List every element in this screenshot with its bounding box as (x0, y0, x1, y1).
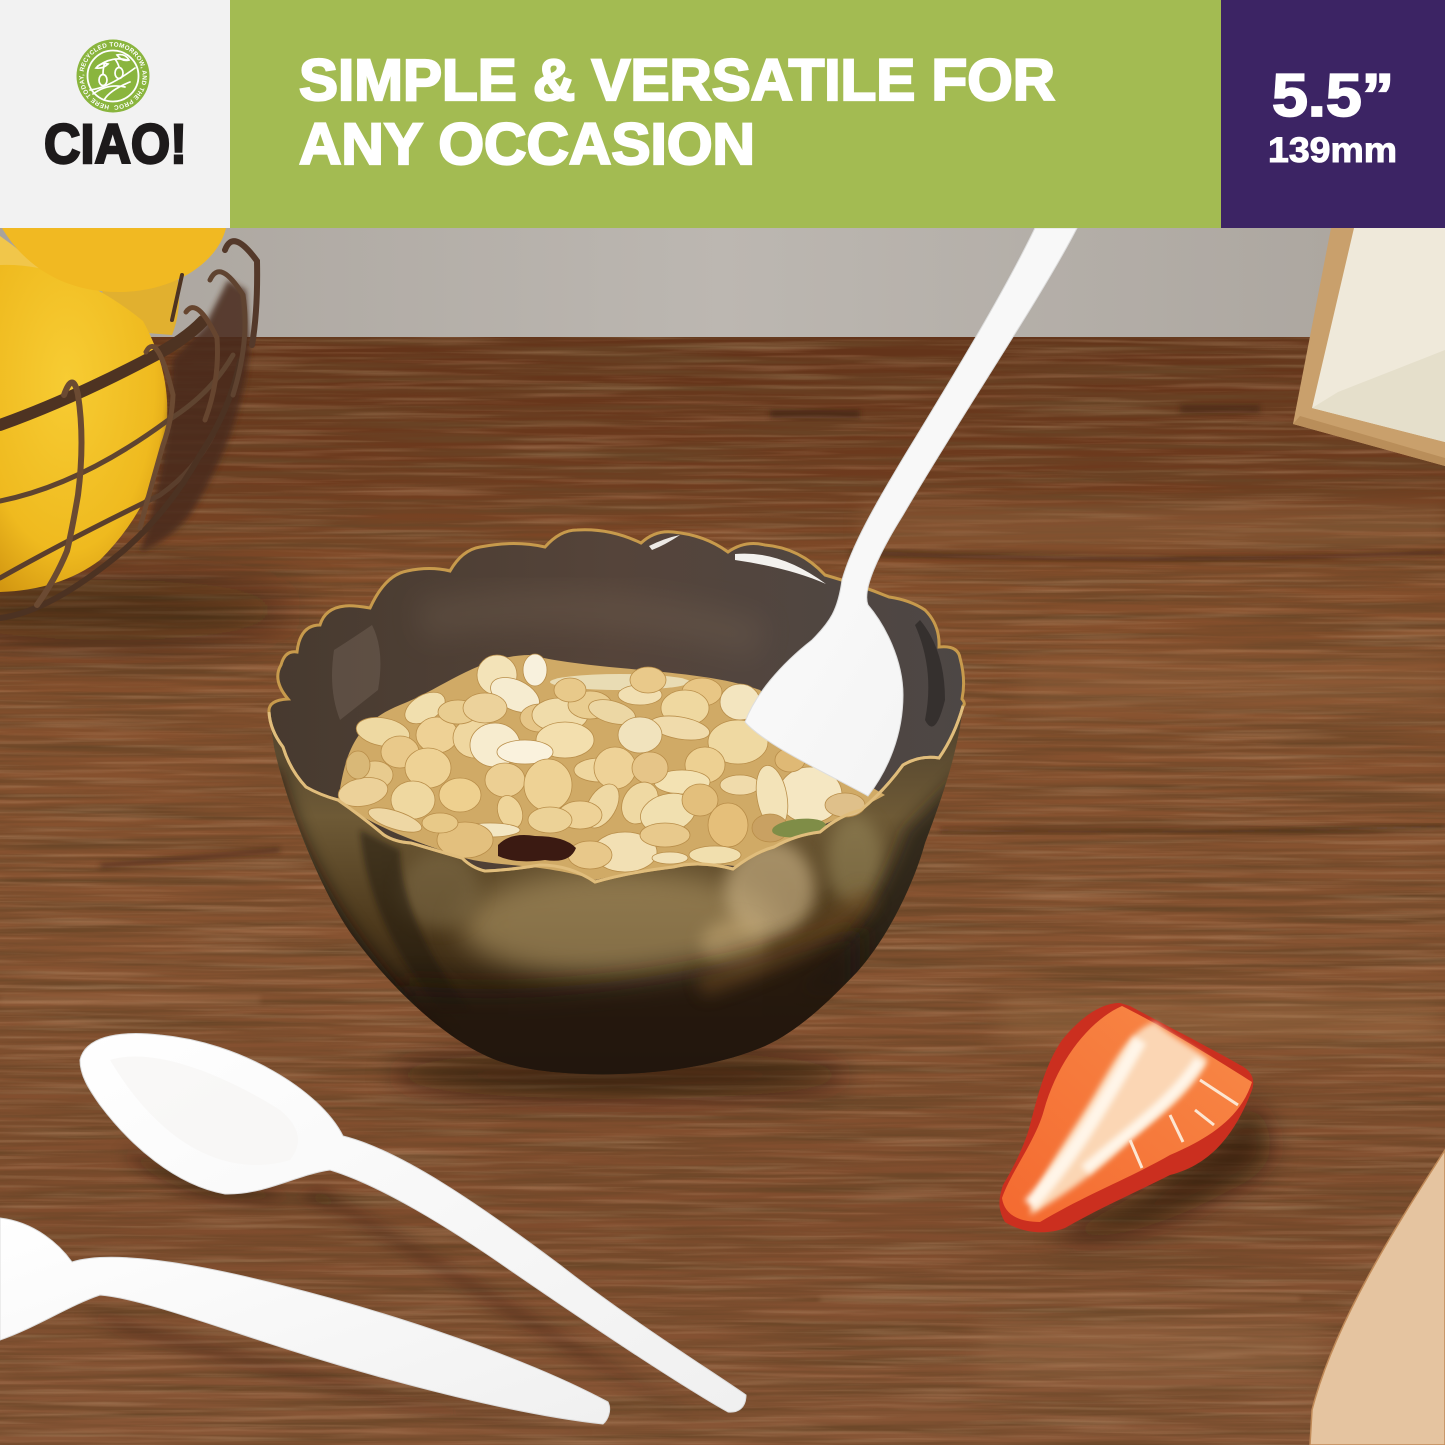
background wall (0, 228, 1445, 340)
wooden table (0, 337, 1445, 1445)
front gold rim (269, 706, 963, 882)
white spoon lower left (0, 1218, 610, 1424)
reflections in the bowl body (278, 763, 948, 1074)
milk (550, 674, 690, 690)
headline text: ANY OCCASION (299, 112, 755, 177)
raisin (498, 835, 576, 861)
picture frame on the table (1293, 228, 1445, 466)
logo panel (0, 0, 230, 228)
shadow of the bowl (390, 1051, 850, 1099)
wire basket (0, 241, 257, 618)
bowl outer body (269, 706, 963, 1074)
headline banner (230, 0, 1221, 228)
lemons (0, 228, 226, 592)
size in inches: 5.5” (1272, 62, 1394, 129)
size badge (1221, 0, 1445, 228)
granola pieces (336, 654, 865, 872)
glass highlights (332, 535, 945, 727)
strawberry slice (999, 1003, 1253, 1232)
shadow beneath the lower spoons (80, 1150, 700, 1435)
bowl interior with scalloped rim (269, 530, 964, 882)
logo emblem (76, 40, 150, 112)
white spoon lower middle (80, 1034, 746, 1412)
spoon head shading (110, 1057, 298, 1165)
white spoon in the bowl (745, 228, 1077, 796)
brand name: CIAO! (44, 112, 187, 175)
granola base (338, 655, 885, 880)
headline text: SIMPLE & VERSATILE FOR (299, 48, 1055, 113)
headline text (299, 48, 1055, 177)
glass bowl (260, 530, 965, 1100)
strawberry shadow (1060, 1100, 1271, 1240)
shadow of the lemon basket (0, 580, 300, 640)
pumpkin seed (771, 816, 827, 840)
size in millimetres: 139mm (1268, 131, 1397, 170)
wooden cutting board (1310, 1150, 1445, 1445)
